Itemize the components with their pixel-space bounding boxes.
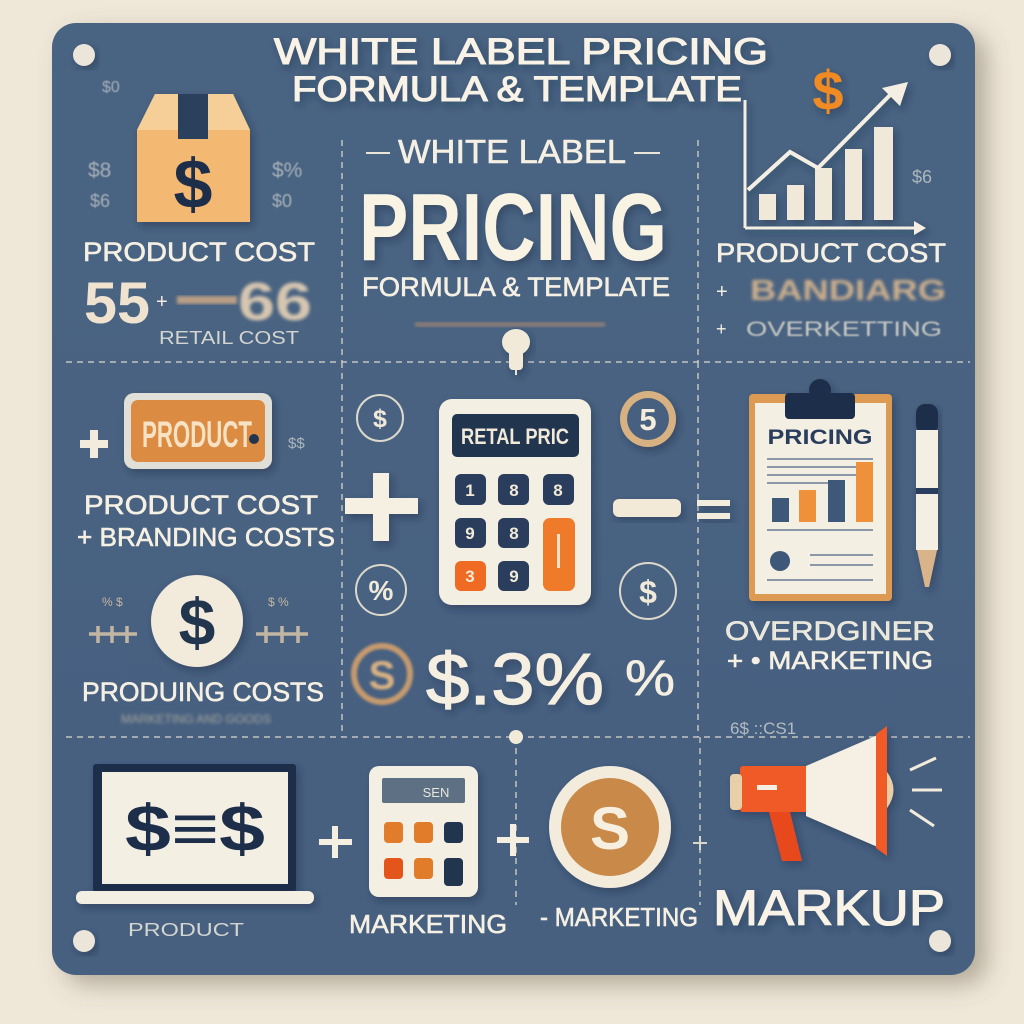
icon: laptop: $≡$: [125, 791, 265, 865]
icon: calculator: 9: [465, 524, 475, 543]
panel: calculator center: $: [639, 574, 657, 610]
panel: product cost: [83, 79, 315, 348]
panel: growth chart: [716, 59, 946, 341]
coin: orange ring: [620, 391, 676, 447]
chart: [745, 82, 926, 235]
label: plus banding: BANDIARG: [750, 275, 946, 307]
title: FORMULA & TEMPLATE: [292, 70, 742, 109]
blurred line: [415, 322, 605, 327]
percent: %: [625, 650, 675, 706]
side marks: % $: [102, 595, 123, 609]
label: marketing: + • MARKETING: [727, 647, 933, 675]
dot on divider: [509, 730, 523, 744]
plus icon: [80, 430, 108, 458]
label: markup: MARKUP: [713, 880, 945, 936]
blurred coin: S: [369, 654, 395, 698]
panel: calculator center: [345, 329, 730, 720]
icon: small calculator: [369, 766, 478, 897]
icon: small calculator: SEN: [423, 785, 449, 800]
plus: [497, 824, 529, 856]
blurred text: MARKETING AND GOODS: [121, 712, 271, 726]
blurred coin: [354, 646, 410, 702]
heading: pricing: PRICING: [359, 174, 667, 281]
small dollar notes: $0: [102, 79, 120, 96]
icon: coin: [549, 766, 671, 888]
label: marketing: - MARKETING: [540, 902, 698, 932]
icon: laptop: [76, 764, 314, 904]
side marks: [89, 595, 308, 643]
icon: calculator: 8: [553, 481, 563, 500]
label: plus banding: +: [716, 281, 728, 303]
icon: calculator: 9: [509, 567, 519, 586]
small note: $$: [288, 435, 305, 452]
icon: calculator: 8: [509, 481, 519, 500]
icon: dollar coin: $: [179, 585, 215, 659]
small dollar notes: $%: [272, 159, 302, 182]
label: product cost: PRODUCT COST: [84, 490, 318, 520]
label: overdginer: OVERDGINER: [725, 616, 935, 646]
pin: [502, 329, 530, 375]
title: [274, 31, 768, 109]
icon: coin: S: [590, 795, 630, 862]
icon: clipboard: PRICING: [768, 426, 872, 449]
panel: branding costs: [77, 393, 335, 726]
label: producing costs: PRODUING COSTS: [82, 677, 324, 707]
icon: product tag: PRODUCT: [142, 414, 252, 455]
label: plus banding: [716, 275, 946, 307]
icon: calculator: 1: [465, 481, 475, 500]
icon: product tag: [124, 393, 272, 469]
coins around calculator: [356, 395, 676, 619]
numbers: +: [156, 291, 168, 313]
heading: white label: WHITE LABEL: [398, 133, 626, 170]
icon: calculator: RETAL PRIC: [461, 424, 569, 449]
label: marketing: MARKETING: [349, 909, 507, 939]
minus and equals: [613, 499, 730, 519]
icon: clipboard: [749, 379, 892, 601]
small dollar notes: $8: [88, 159, 111, 182]
small dollar notes: $0: [272, 191, 292, 211]
small dollar notes: [88, 79, 302, 211]
plus: [319, 826, 352, 858]
label: plus overketting: OVERKETTING: [746, 318, 942, 341]
panel: pricing clipboard: [725, 379, 938, 738]
title: WHITE LABEL PRICING: [274, 31, 768, 72]
icon: calculator: 3: [465, 567, 475, 586]
numbers: [84, 271, 312, 336]
small note: $6: [912, 167, 932, 187]
small plus: [693, 836, 707, 850]
icon: dollar: $: [812, 59, 844, 122]
icon: pen: [916, 404, 938, 587]
side marks: $ %: [268, 595, 289, 609]
icon: box with dollar: $: [174, 145, 212, 223]
label: product cost: PRODUCT COST: [83, 237, 315, 267]
icon: dollar coin: [151, 575, 243, 667]
label: branding costs: + BRANDING COSTS: [77, 522, 335, 552]
small dollar notes: $6: [90, 191, 110, 211]
icon: box with dollar: [137, 94, 250, 223]
panel: calculator center: $: [373, 405, 387, 433]
numbers: 66: [238, 272, 312, 332]
subheading: FORMULA & TEMPLATE: [362, 272, 670, 302]
panel: calculator center: %: [369, 575, 394, 606]
coin: orange ring: 5: [639, 402, 657, 437]
panel: bottom row: [76, 726, 945, 940]
big number: $.3%: [426, 640, 604, 720]
label: product: PRODUCT: [128, 920, 244, 940]
panel: center heading: [359, 133, 670, 327]
icon: calculator: [439, 399, 591, 605]
sound waves: [910, 758, 942, 826]
big plus: [345, 473, 418, 541]
icon: calculator: 8: [509, 524, 519, 543]
label: retail cost: RETAIL COST: [159, 328, 299, 348]
icon: megaphone: [730, 726, 894, 861]
corner pins: [73, 44, 951, 952]
label: plus overketting: +: [716, 319, 727, 339]
label: product cost: PRODUCT COST: [716, 238, 946, 268]
dashed dividers: [66, 140, 970, 905]
label: plus overketting: [716, 318, 942, 341]
numbers: 55: [84, 271, 150, 336]
small note: 6$ ::CS1: [730, 719, 796, 738]
